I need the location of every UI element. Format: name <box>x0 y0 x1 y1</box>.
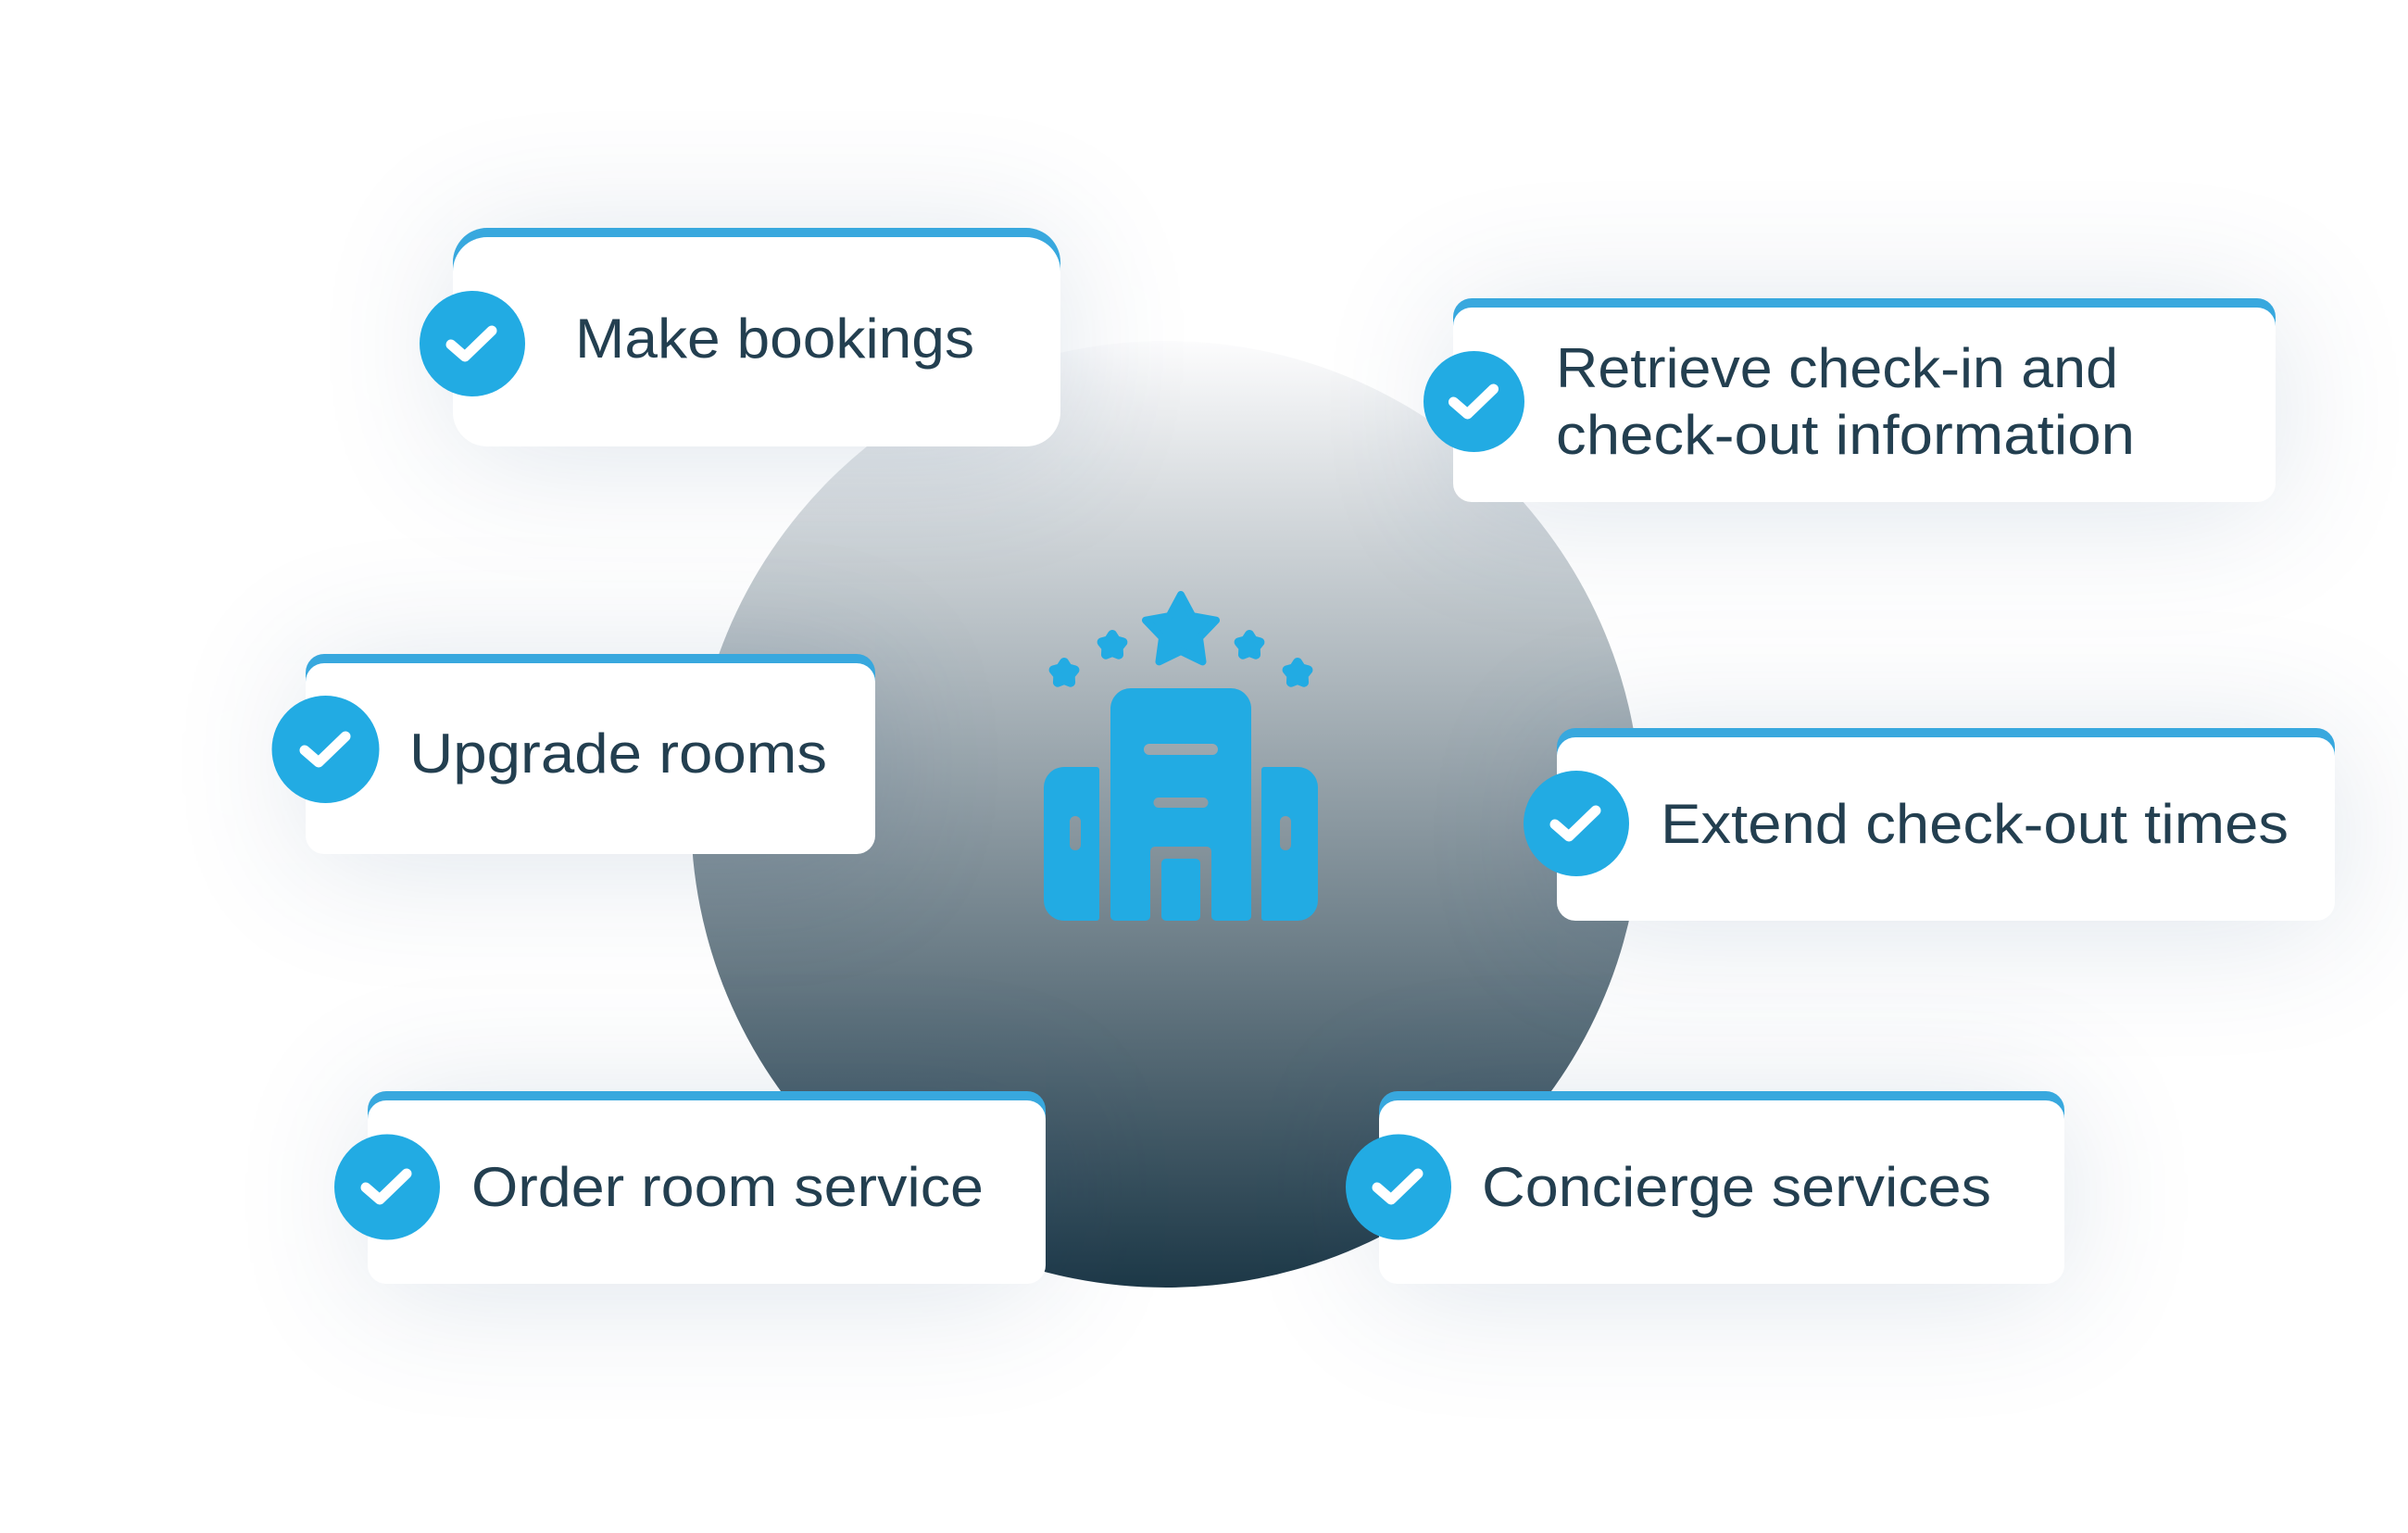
label: check-out information <box>1556 404 2135 466</box>
check badge <box>1524 771 1629 876</box>
panel: upgrade rooms <box>272 654 875 863</box>
icon: small star outer right <box>1287 662 1308 683</box>
check badge <box>1423 351 1524 452</box>
check badge <box>1346 1134 1451 1239</box>
icon: small star inner left <box>1102 635 1122 655</box>
label: Make bookings <box>575 308 974 370</box>
hotel icon <box>1044 595 1318 921</box>
check badge <box>272 696 380 803</box>
panel: concierge services <box>1346 1091 2064 1293</box>
background circle <box>691 341 1641 1288</box>
icon: door <box>1161 859 1200 921</box>
icon: small star outer left <box>1054 662 1074 683</box>
label: Retrieve check-in and <box>1556 337 2118 399</box>
icon: right wing <box>1261 767 1318 921</box>
label <box>1556 337 2135 466</box>
check badge <box>334 1134 440 1239</box>
label: Order room service <box>471 1156 984 1218</box>
icon: large star <box>1146 595 1216 661</box>
label: Concierge services <box>1482 1156 1991 1218</box>
panel: retrieve check-in and check-out information <box>1423 298 2276 511</box>
panel: make bookings <box>420 228 1060 456</box>
icon: central tower <box>1110 688 1251 921</box>
panel: extend check-out times <box>1524 728 2335 930</box>
icon: left wing <box>1044 767 1099 921</box>
panel: order room service <box>334 1091 1046 1293</box>
icon: small star inner right <box>1239 635 1260 655</box>
label: Upgrade rooms <box>409 723 827 785</box>
label: Extend check-out times <box>1661 793 2289 855</box>
check badge <box>420 291 525 396</box>
